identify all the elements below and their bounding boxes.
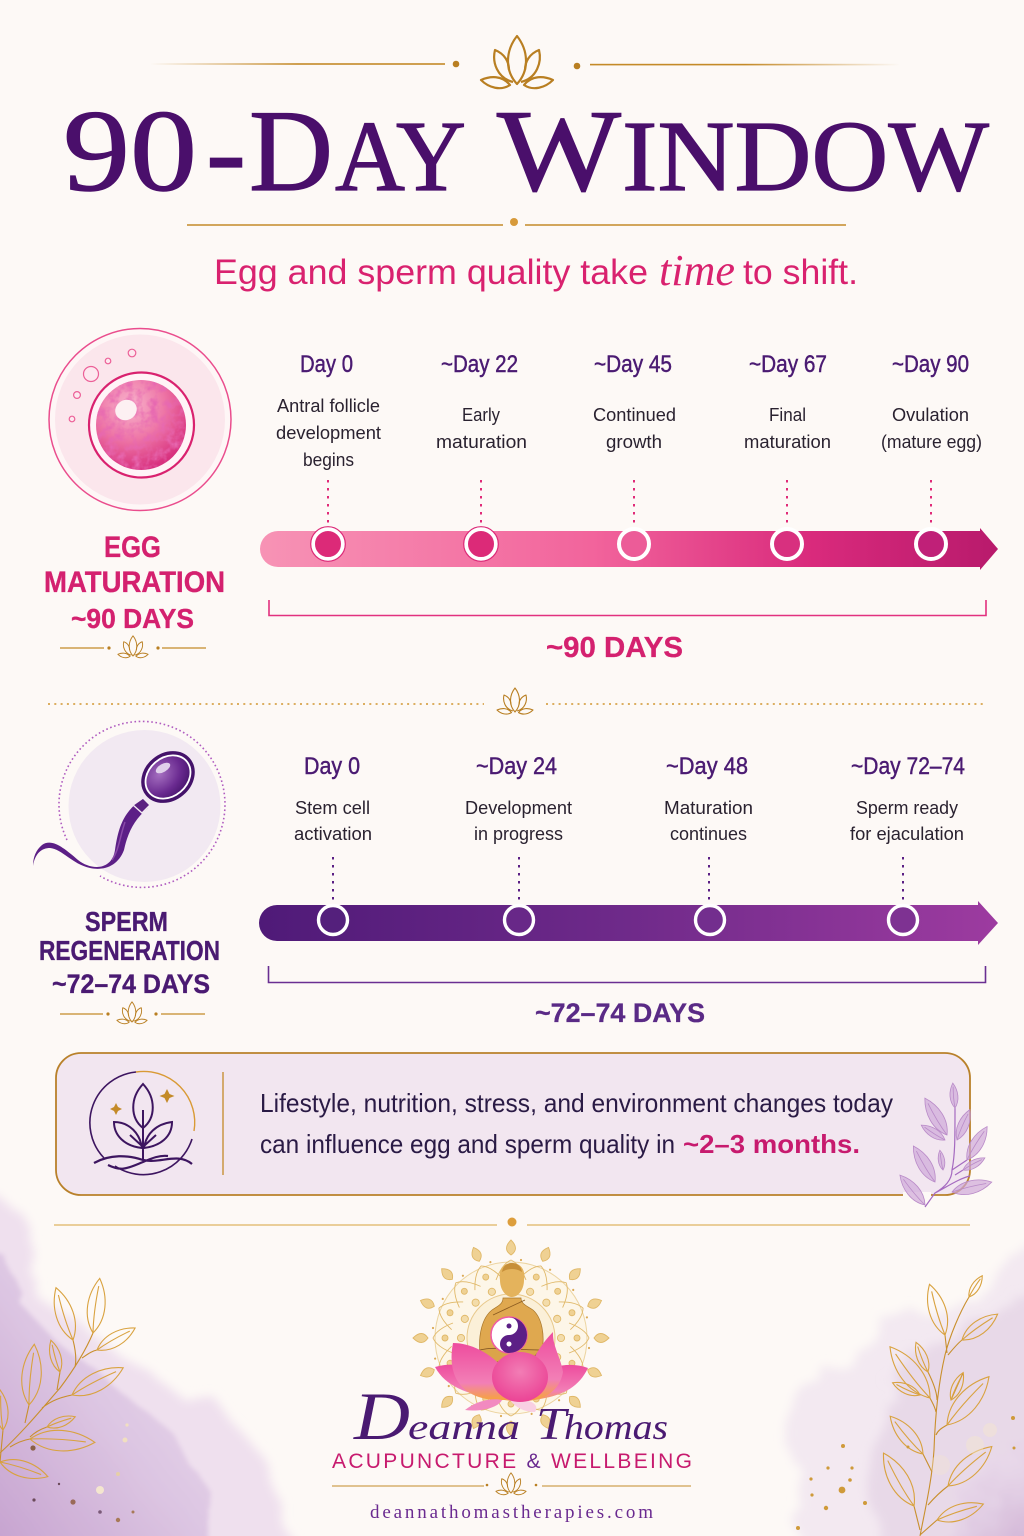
heading: egg maturation: EGG [104, 531, 161, 564]
egg timeline labels: Continued [593, 404, 676, 425]
sperm timeline labels [294, 753, 965, 844]
title: INDOW [622, 100, 990, 212]
egg timeline labels: Final [769, 404, 806, 425]
sperm timeline labels: Day 0 [304, 753, 360, 780]
sperm timeline labels: in progress [474, 823, 563, 844]
egg timeline labels: ~Day 45 [594, 351, 672, 378]
title: W [497, 87, 622, 216]
gold speckles [30, 1416, 1015, 1530]
logo script: Deanna Thomas: D [353, 1378, 410, 1454]
heading: sperm regeneration: ~72–74 DAYS [52, 969, 210, 999]
section divider [48, 688, 986, 714]
logo script: Deanna Thomas [353, 1378, 668, 1454]
logo script: Deanna Thomas: T [536, 1398, 570, 1449]
egg timeline labels: (mature egg) [881, 431, 982, 452]
egg timeline labels: Ovulation [892, 404, 969, 425]
callout text: ~2–3 months. [683, 1129, 860, 1159]
callout panel [56, 1053, 970, 1195]
watercolor wash: bottom left [0, 1185, 300, 1536]
subtitle [214, 246, 858, 295]
subtitle: Egg and sperm quality take [214, 253, 648, 292]
heading: egg maturation: ~90 DAYS [71, 603, 194, 634]
title [63, 87, 990, 216]
yin-yang [491, 1317, 527, 1353]
egg timeline labels: ~Day 22 [441, 351, 518, 378]
sperm timeline labels: ~Day 24 [476, 753, 557, 780]
top ornament: lotus with lines [150, 36, 900, 88]
sperm timeline bar [259, 857, 998, 945]
label: ~90 days: ~90 DAYS [546, 632, 683, 664]
sperm timeline labels: for ejaculation [850, 823, 964, 844]
bracket: sperm span [268, 966, 986, 982]
callout text: Lifestyle, nutrition, stress, and environment changes today [260, 1088, 893, 1118]
egg timeline labels: ~Day 67 [749, 351, 827, 378]
icon: sperm cell [33, 721, 225, 887]
subtitle: to shift. [743, 253, 858, 292]
logo: mandala, Buddha and lotus [413, 1240, 609, 1436]
callout text [260, 1088, 893, 1159]
ornament: logo [332, 1473, 691, 1495]
egg timeline labels: Antral follicle [277, 395, 380, 416]
logo script: Deanna Thomas: eanna [408, 1407, 520, 1447]
title: AY [335, 100, 466, 212]
egg timeline labels: maturation [436, 431, 527, 452]
heading: sperm regeneration: REGENERATION [39, 935, 220, 966]
logo tagline: ACUPUNCTURE & WELLBEING [332, 1450, 692, 1473]
sperm timeline labels: ~Day 72–74 [851, 753, 965, 780]
lotus flower [435, 1332, 588, 1412]
egg timeline labels: Early [462, 404, 501, 425]
heading: sperm regeneration [39, 906, 220, 999]
sperm timeline labels: continues [670, 823, 747, 844]
egg timeline bar [260, 480, 998, 570]
heading: egg maturation [44, 531, 225, 634]
sperm timeline labels: Maturation [664, 797, 753, 818]
website url: deannathomastherapies.com [370, 1502, 653, 1523]
gold branch: bottom left [0, 1277, 139, 1484]
bracket: egg span [269, 600, 986, 616]
watercolor wash: bottom right [790, 1215, 1024, 1536]
ornament: egg heading [60, 636, 206, 658]
egg timeline labels: maturation [744, 431, 831, 452]
egg timeline labels [276, 351, 982, 470]
heading: sperm regeneration: SPERM [85, 906, 168, 937]
title: - [206, 87, 246, 216]
egg timeline labels: ~Day 90 [892, 351, 969, 378]
heading: egg maturation: MATURATION [44, 566, 225, 599]
subtitle: time [659, 246, 735, 295]
gold branch: bottom right [875, 1274, 1002, 1536]
label: ~72–74 days: ~72–74 DAYS [535, 998, 705, 1028]
sperm timeline labels: Sperm ready [856, 797, 959, 818]
callout text: can influence egg and sperm quality in [260, 1129, 675, 1159]
lilac sprig decoration [895, 1083, 993, 1209]
icon: sprout in circle [90, 1071, 195, 1175]
logo script: Deanna Thomas: homas [564, 1407, 668, 1447]
Buddha figure [474, 1263, 543, 1362]
title: 90 [63, 87, 197, 216]
sperm timeline labels: Development [465, 797, 572, 818]
divider under title [187, 218, 846, 226]
egg timeline labels: growth [606, 431, 662, 452]
sperm timeline labels: Stem cell [295, 797, 370, 818]
ornament: sperm heading [60, 1002, 205, 1024]
egg timeline labels: development [276, 422, 381, 443]
sperm timeline labels: activation [294, 823, 372, 844]
icon: egg cell [49, 328, 231, 510]
title: D [249, 87, 333, 216]
egg timeline labels: begins [303, 449, 354, 470]
sperm timeline labels: ~Day 48 [666, 753, 748, 780]
egg timeline labels: Day 0 [300, 351, 353, 378]
footer divider [54, 1218, 970, 1226]
